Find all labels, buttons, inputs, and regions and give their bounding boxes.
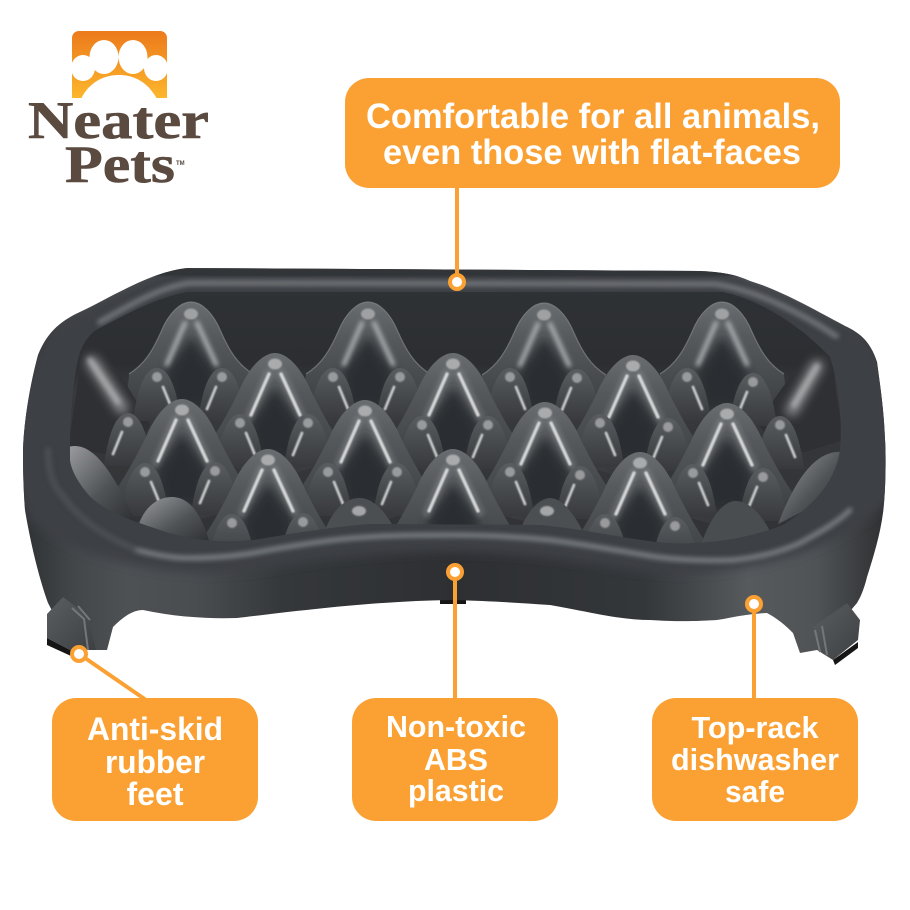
- back row cones: [128, 301, 785, 408]
- callout: top-rack dishwasher safe: safe: [725, 774, 785, 809]
- row pegs middle: [106, 413, 802, 464]
- front pegs: [218, 513, 690, 543]
- row pegs lower: [121, 462, 787, 521]
- callout: anti-skid rubber feet: feet: [126, 776, 184, 812]
- row pegs upper: [133, 368, 777, 426]
- fourth row cones: [206, 449, 703, 543]
- callout: top-rack dishwasher safe: dishwasher: [671, 742, 839, 777]
- callout: anti-skid rubber feet: Anti-skid: [87, 711, 223, 747]
- connector: dishwasher callout: [747, 597, 761, 700]
- connector: rubber feet callout: [72, 647, 146, 700]
- rim highlights: [48, 283, 850, 560]
- callout: non-toxic ABS plastic: plastic: [408, 773, 504, 808]
- second row cones: [216, 353, 693, 458]
- logo wordmark: Pets: [65, 136, 175, 194]
- callout: non-toxic ABS plastic: Non-toxic: [386, 709, 526, 744]
- logo: Neater Pets: [28, 31, 209, 194]
- product: slow-feeder bowl: [15, 268, 893, 665]
- bowl well: [70, 292, 841, 544]
- callout: comfortable for all animals: even those with flat-faces: [383, 133, 801, 172]
- connector: top callout: [450, 186, 464, 289]
- callout: anti-skid rubber feet: [52, 698, 258, 821]
- callout: comfortable for all animals: Comfortable for all animals,: [366, 97, 820, 136]
- logo wordmark: TM: [176, 161, 185, 167]
- left and right end lobes: [68, 350, 844, 454]
- logo wordmark: [28, 92, 209, 194]
- third row cones: [106, 399, 803, 528]
- bowl back foot under: [440, 598, 466, 604]
- callout: comfortable for all animals: [345, 78, 840, 188]
- connector: non-toxic callout: [448, 565, 462, 700]
- icon: paw badge: [71, 31, 168, 99]
- callout: non-toxic ABS plastic: ABS: [424, 742, 488, 777]
- front edge lobes: [68, 446, 842, 548]
- bowl feet: [47, 597, 860, 665]
- logo wordmark: Neater: [28, 92, 209, 150]
- callout: anti-skid rubber feet: rubber: [105, 744, 205, 780]
- bowl rim: [15, 268, 893, 573]
- callout: top-rack dishwasher safe: [652, 698, 858, 821]
- bowl body: [23, 268, 886, 653]
- callout: non-toxic ABS plastic: [352, 698, 558, 821]
- callout: top-rack dishwasher safe: Top-rack: [692, 710, 819, 745]
